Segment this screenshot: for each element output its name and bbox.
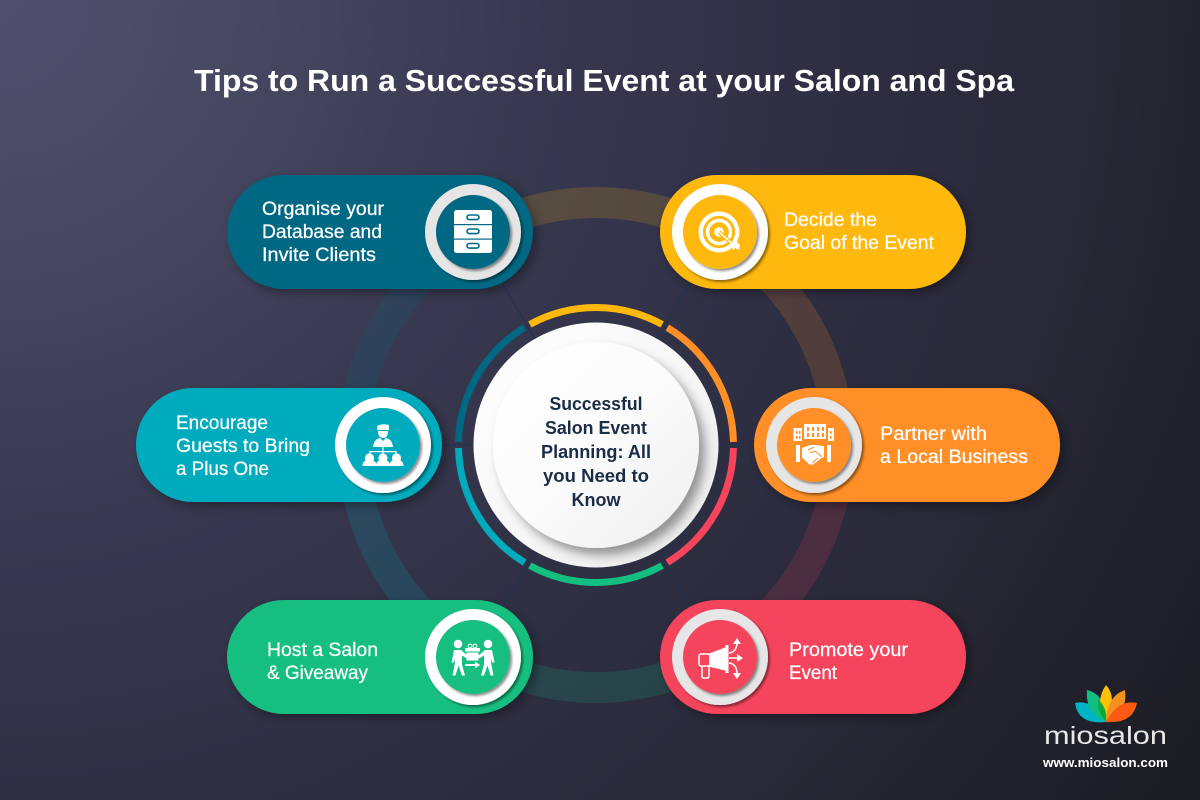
text: encourage: Guests to Bring (176, 435, 310, 457)
icon: target with arrow (701, 214, 740, 250)
text: goal (784, 209, 935, 254)
text: encourage: Encourage (176, 412, 268, 434)
text: partner: Partner with (880, 423, 987, 445)
panel: encourage guests (136, 388, 442, 502)
segmented colour ring (407, 256, 785, 634)
logo: miosalon: www.miosalon.com (1042, 755, 1168, 770)
panel: decide the goal (660, 175, 966, 289)
icon: two people exchanging a gift (452, 640, 494, 676)
text: organise: Invite Clients (262, 244, 376, 266)
icon: lotus (1075, 685, 1137, 722)
text: organise (262, 198, 384, 266)
text: giveaway (267, 639, 378, 684)
logo: miosalon (1042, 685, 1168, 770)
logo: miosalon: miosalon (1044, 722, 1167, 750)
text: partner: a Local Business (880, 446, 1028, 468)
icon: filing cabinet (454, 210, 492, 253)
text: giveaway: & Giveaway (267, 662, 368, 684)
large background ring (265, 114, 927, 776)
text: encourage: a Plus One (176, 458, 269, 480)
text: organise: Database and (262, 221, 382, 243)
text: promote (789, 639, 908, 684)
text: goal: Decide the (784, 209, 877, 231)
text: promote: Promote your (789, 639, 908, 661)
text: partner (880, 423, 1028, 468)
centre disc (474, 322, 718, 568)
panel: host a salon giveaway (227, 600, 533, 714)
panel: partner with a local business (754, 388, 1060, 502)
icon: buildings and handshake (794, 424, 834, 465)
panel: promote your event (660, 600, 966, 714)
text: giveaway: Host a Salon (267, 639, 378, 661)
panel: organise your database (227, 175, 533, 289)
icon: host with guests (362, 424, 404, 466)
text: encourage (176, 412, 310, 480)
centre text (541, 393, 651, 510)
text: organise: Organise your (262, 198, 384, 220)
centre text: Salon Event (545, 417, 647, 438)
text: promote: Event (789, 662, 838, 684)
centre text: Planning: All (541, 441, 651, 462)
centre text: you Need to (543, 465, 649, 486)
centre text: Know (572, 489, 621, 510)
title: Tips to Run a Successful Event at your Salon and Spa (194, 63, 1015, 98)
text: goal: Goal of the Event (784, 232, 935, 254)
connector lines (436, 276, 760, 614)
centre text: Successful (550, 393, 642, 414)
icon: megaphone with arrows (699, 638, 743, 679)
